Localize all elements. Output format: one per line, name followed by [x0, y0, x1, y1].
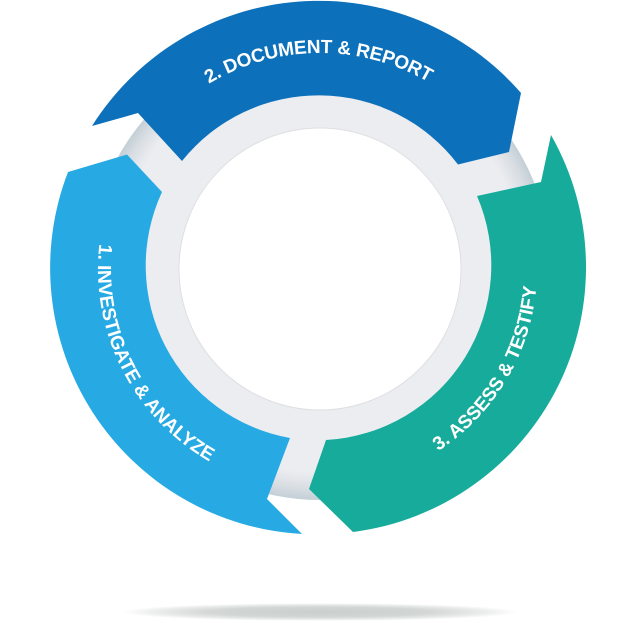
teal arrow — [309, 135, 586, 532]
label 3: 3. ASSESS & TESTIFY — [432, 286, 536, 450]
light blue arrow — [50, 154, 302, 534]
segment 1: investigate and analyze — [50, 154, 302, 534]
ground shadow — [122, 603, 518, 621]
dark blue arrow — [92, 1, 521, 164]
white centre circle — [179, 128, 461, 410]
grey ring — [89, 38, 551, 500]
segment 3: assess and testify — [309, 135, 586, 532]
label 1: 1. INVESTIGATE & ANALYZE — [98, 245, 216, 462]
segment 2: document and report — [92, 0, 521, 164]
label 2: 2. DOCUMENT & REPORT — [204, 40, 434, 84]
